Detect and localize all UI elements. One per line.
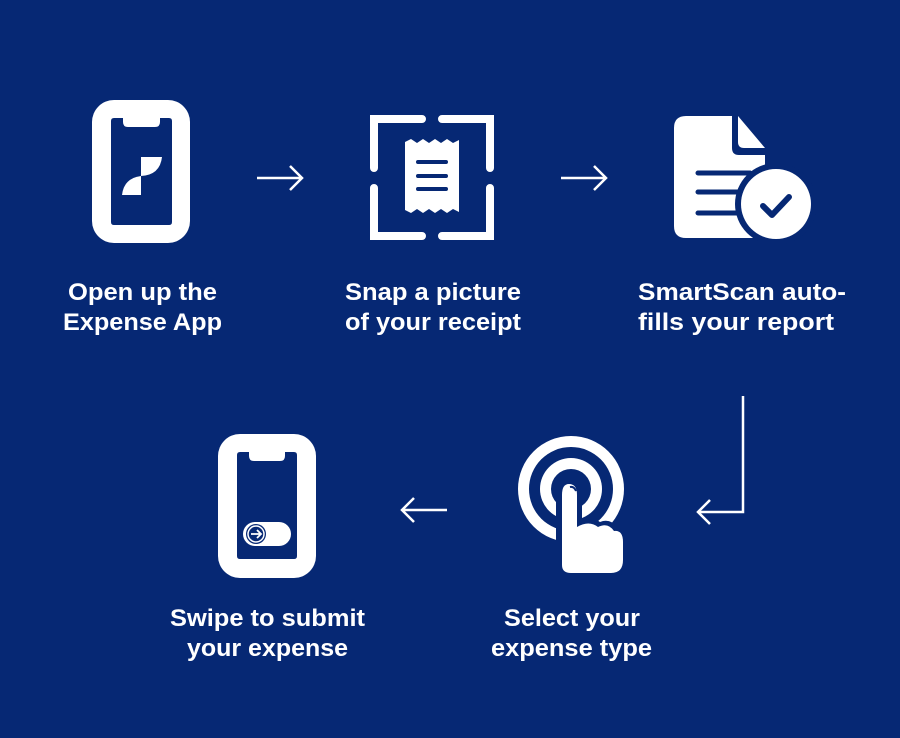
- label: smartscan: [638, 279, 846, 336]
- label: swipe: your expense: [187, 635, 348, 662]
- label: swipe: Swipe to submit: [170, 605, 365, 632]
- label: snap picture: of your receipt: [345, 309, 521, 336]
- label: open app: Open up the: [68, 279, 217, 306]
- label: snap picture: Snap a picture: [345, 279, 521, 306]
- label: swipe: [170, 605, 365, 662]
- arrow 2: [561, 166, 606, 190]
- icon: phone with app logo: [92, 100, 190, 243]
- label: snap picture: [345, 279, 521, 336]
- label: select type: [491, 605, 652, 662]
- label: select type: expense type: [491, 635, 652, 662]
- icon: phone with swipe toggle: [218, 434, 316, 578]
- icon: document with check: [674, 116, 817, 245]
- label: smartscan: fills your report: [638, 309, 834, 336]
- icon: receipt scan: [374, 119, 490, 236]
- icon: touch target: [518, 436, 628, 577]
- label: open app: [63, 279, 222, 336]
- arrow 3 left: [402, 498, 447, 522]
- arrow 1: [257, 166, 302, 190]
- label: open app: Expense App: [63, 309, 222, 336]
- label: select type: Select your: [504, 605, 640, 632]
- arrow: elbow down-left: [698, 396, 743, 524]
- label: smartscan: SmartScan auto-: [638, 279, 846, 306]
